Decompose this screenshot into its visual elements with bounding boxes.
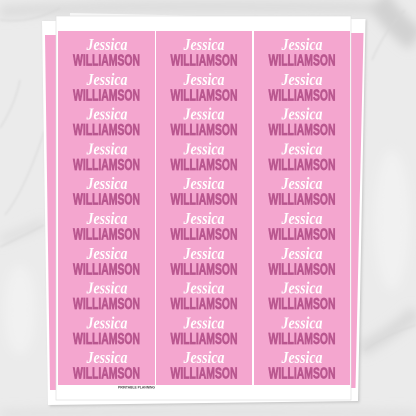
label column 3	[254, 31, 350, 385]
names column 1: Jessica	[86, 313, 128, 332]
names column 2: WILLIAMSON	[170, 87, 238, 104]
names column 1: Jessica	[86, 70, 128, 89]
names column 3: Jessica	[281, 174, 322, 193]
names column 1	[73, 35, 140, 383]
names column 3: WILLIAMSON	[268, 296, 336, 313]
back sheet wedge top	[70, 13, 230, 17]
names column 3: Jessica	[281, 70, 322, 89]
names column 2: Jessica	[183, 70, 224, 89]
names column 1: WILLIAMSON	[73, 296, 140, 313]
names column 1: WILLIAMSON	[73, 192, 140, 209]
names column 1: Jessica	[86, 35, 128, 54]
names column 1: WILLIAMSON	[73, 157, 140, 174]
credit text: PRINTABLE PLANNING	[118, 386, 155, 390]
names column 2: WILLIAMSON	[170, 52, 238, 70]
names column 2: WILLIAMSON	[170, 261, 238, 278]
names column 2: Jessica	[183, 139, 224, 158]
front sheet	[56, 16, 351, 400]
names column 2: Jessica	[183, 348, 224, 367]
names column 3	[268, 35, 336, 383]
names column 1: Jessica	[86, 174, 128, 193]
names column 2	[170, 35, 238, 383]
pink strip right	[345, 33, 364, 388]
names column 3: WILLIAMSON	[268, 331, 336, 348]
names column 2: Jessica	[183, 313, 224, 332]
names column 3: WILLIAMSON	[268, 87, 336, 104]
names column 1: Jessica	[86, 244, 128, 263]
names column 1: WILLIAMSON	[73, 226, 140, 244]
back sheet	[42, 19, 366, 405]
names column 1: Jessica	[86, 209, 128, 228]
names column 1: Jessica	[86, 279, 128, 298]
names column 3: Jessica	[281, 139, 322, 158]
names column 3: Jessica	[281, 279, 322, 298]
names column 1: WILLIAMSON	[73, 122, 140, 139]
names column 2: Jessica	[183, 209, 224, 228]
names column 1: WILLIAMSON	[73, 261, 140, 278]
names column 3: Jessica	[281, 35, 322, 54]
label column 2	[156, 31, 252, 385]
names column 2: WILLIAMSON	[170, 157, 238, 174]
pink strip left	[45, 35, 60, 390]
names column 2: WILLIAMSON	[170, 192, 238, 209]
names column 2: Jessica	[183, 174, 224, 193]
names column 3: Jessica	[281, 348, 322, 367]
names column 2: WILLIAMSON	[170, 296, 238, 313]
names column 1: WILLIAMSON	[73, 331, 140, 348]
names column 3: Jessica	[281, 209, 322, 228]
names column 3: Jessica	[281, 105, 322, 124]
names column 2: WILLIAMSON	[170, 366, 238, 383]
names column 3: WILLIAMSON	[268, 157, 336, 174]
names column 2: Jessica	[183, 105, 224, 124]
names column 1: Jessica	[86, 348, 128, 367]
names column 3: WILLIAMSON	[268, 122, 336, 139]
names column 3: Jessica	[281, 244, 322, 263]
names column 2: Jessica	[183, 35, 224, 54]
names column 2: WILLIAMSON	[170, 122, 238, 139]
names column 2: WILLIAMSON	[170, 331, 238, 348]
names column 1: Jessica	[86, 139, 128, 158]
names column 1: Jessica	[86, 105, 128, 124]
names column 1: WILLIAMSON	[73, 366, 140, 383]
sheet shadow	[43, 20, 366, 406]
names column 3: WILLIAMSON	[268, 261, 336, 278]
names column 3: WILLIAMSON	[268, 226, 336, 244]
names column 2: Jessica	[183, 279, 224, 298]
names column 1: WILLIAMSON	[73, 52, 140, 70]
names column 3: WILLIAMSON	[268, 52, 336, 70]
names column 3: WILLIAMSON	[268, 366, 336, 383]
names column 1: WILLIAMSON	[73, 87, 140, 104]
label column 1	[58, 31, 155, 385]
names column 2: Jessica	[183, 244, 224, 263]
names column 2: WILLIAMSON	[170, 226, 238, 244]
names column 3: WILLIAMSON	[268, 192, 336, 209]
names column 3: Jessica	[281, 313, 322, 332]
